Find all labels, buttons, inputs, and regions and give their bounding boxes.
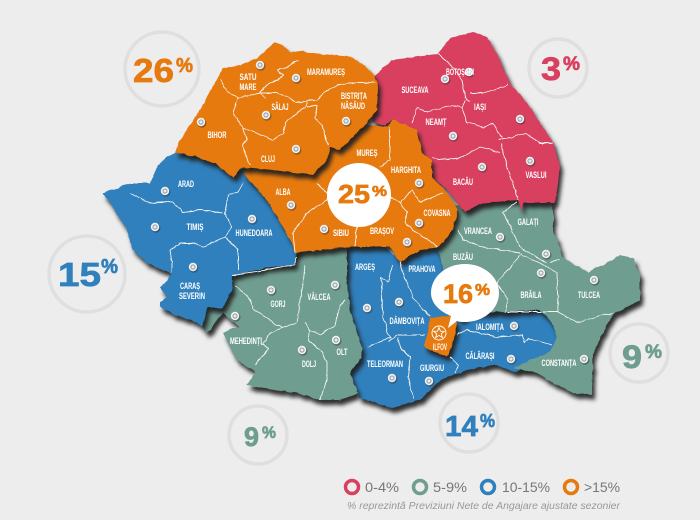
county name labels: MARE — [240, 82, 256, 93]
county name labels: DÂMBOVIȚA — [390, 315, 425, 327]
county name labels: BIHOR — [208, 130, 227, 141]
county name labels: BRĂILA — [520, 290, 542, 301]
county name labels: SUCEAVA — [402, 85, 429, 96]
county name labels: VASLUI — [526, 170, 546, 181]
region: south-east, green — [436, 195, 640, 395]
county name labels: GIURGIU — [420, 363, 444, 374]
callout: 9% south-east: 9 — [622, 339, 642, 375]
callout: 9% south-west: % — [262, 423, 276, 442]
county name labels: IAȘI — [474, 102, 486, 113]
region: west, blue — [103, 150, 300, 327]
icon: star in Ilfov — [432, 326, 446, 340]
region: center, orange — [243, 119, 458, 262]
region: south-west, green — [202, 240, 362, 400]
callout: 3% north-east: 3 — [541, 51, 561, 87]
county name labels: HARGHITA — [391, 165, 421, 176]
county name labels: MEHEDINȚI — [230, 336, 262, 347]
callout: 9% south-west — [229, 406, 287, 464]
callout: 3% north-east: % — [563, 54, 580, 75]
county name labels: ALBA — [276, 187, 291, 198]
map of Romania by region — [103, 32, 640, 408]
callout: 25% center: % — [372, 183, 387, 200]
callout: 9% south-east: % — [645, 342, 662, 363]
callout: 26% north-west — [125, 32, 199, 106]
county name labels: SĂLAJ — [272, 102, 288, 113]
legend: 10-15% — [502, 479, 550, 495]
county name labels: NEAMȚ — [426, 117, 447, 128]
county name labels: SATU — [240, 72, 257, 83]
county name labels: DOLJ — [302, 359, 316, 370]
county name labels: IALOMIȚA — [476, 322, 504, 333]
legend note: % reprezintă Previziuni Nete de Angajare ajustate sezonier — [347, 500, 620, 512]
county name labels: BOTOȘANI — [446, 67, 474, 78]
county name labels: CLUJ — [261, 154, 275, 165]
callout: 14% south — [440, 394, 498, 452]
county name labels: TELEORMAN — [367, 359, 403, 370]
county name labels: TIMIȘ — [186, 222, 204, 233]
callout: 16% Ilfov speech bubble: % — [475, 282, 490, 299]
county name labels: CĂLĂRAȘI — [466, 351, 494, 362]
county name labels: ARAD — [178, 179, 194, 190]
region: north-east, red — [370, 32, 560, 212]
county name labels: CONSTANȚA — [542, 358, 577, 369]
callout: 15% west: % — [101, 256, 118, 278]
county name labels: MARAMUREȘ — [307, 67, 345, 78]
county name labels: COVASNA — [424, 208, 451, 219]
county name labels: PRAHOVA — [408, 264, 436, 275]
callout: 14% south: % — [480, 411, 495, 431]
county name labels: HUNEDOARA — [236, 228, 273, 239]
callout: 9% south-east — [610, 324, 668, 382]
county name labels: BUZĂU — [453, 252, 473, 263]
county name labels: GALAȚI — [518, 217, 538, 228]
county name labels: BACĂU — [453, 177, 473, 188]
county name labels: CARAȘ — [180, 281, 200, 292]
county name labels: TULCEA — [578, 290, 600, 301]
legend: 5-9% — [433, 479, 467, 495]
county name labels — [178, 67, 600, 374]
county name labels: VRANCEA — [464, 226, 492, 237]
county name labels: ILFOV — [433, 342, 447, 353]
county name labels: NĂSĂUD — [341, 101, 365, 112]
callout: 16% Ilfov speech bubble: 16 — [443, 279, 473, 309]
county name labels: ARGEȘ — [355, 262, 375, 273]
callout: 26% north-west: % — [176, 55, 193, 77]
region: north-west, orange — [175, 42, 378, 178]
callout: 14% south: 14 — [445, 411, 478, 443]
callout: 16% Ilfov speech bubble — [431, 264, 499, 328]
region: south, blue — [340, 240, 562, 408]
legend: 0-4% — [365, 479, 399, 495]
legend: >15% — [584, 479, 620, 495]
callout: 26% north-west: 26 — [133, 52, 174, 89]
county name labels: MUREȘ — [356, 148, 378, 159]
county borders — [130, 54, 612, 400]
callout: 9% south-west: 9 — [244, 422, 259, 452]
county name labels: BISTRIȚA — [341, 91, 367, 102]
county name labels: BRAȘOV — [370, 226, 394, 237]
county name labels: OLT — [336, 347, 348, 358]
county location pins — [151, 61, 600, 387]
county name labels: GORJ — [270, 299, 286, 310]
county name labels: SIBIU — [333, 228, 349, 239]
legend — [346, 479, 620, 495]
callout: 15% west — [49, 236, 125, 312]
county name labels: VÂLCEA — [308, 291, 331, 303]
callout: 25% center: 25 — [338, 179, 370, 209]
callout: 25% center — [327, 163, 391, 227]
county name labels: SEVERIN — [179, 291, 205, 302]
callout: 3% north-east — [529, 39, 587, 97]
county: Ilfov, orange — [423, 315, 457, 357]
callout: 15% west: 15 — [58, 256, 101, 293]
